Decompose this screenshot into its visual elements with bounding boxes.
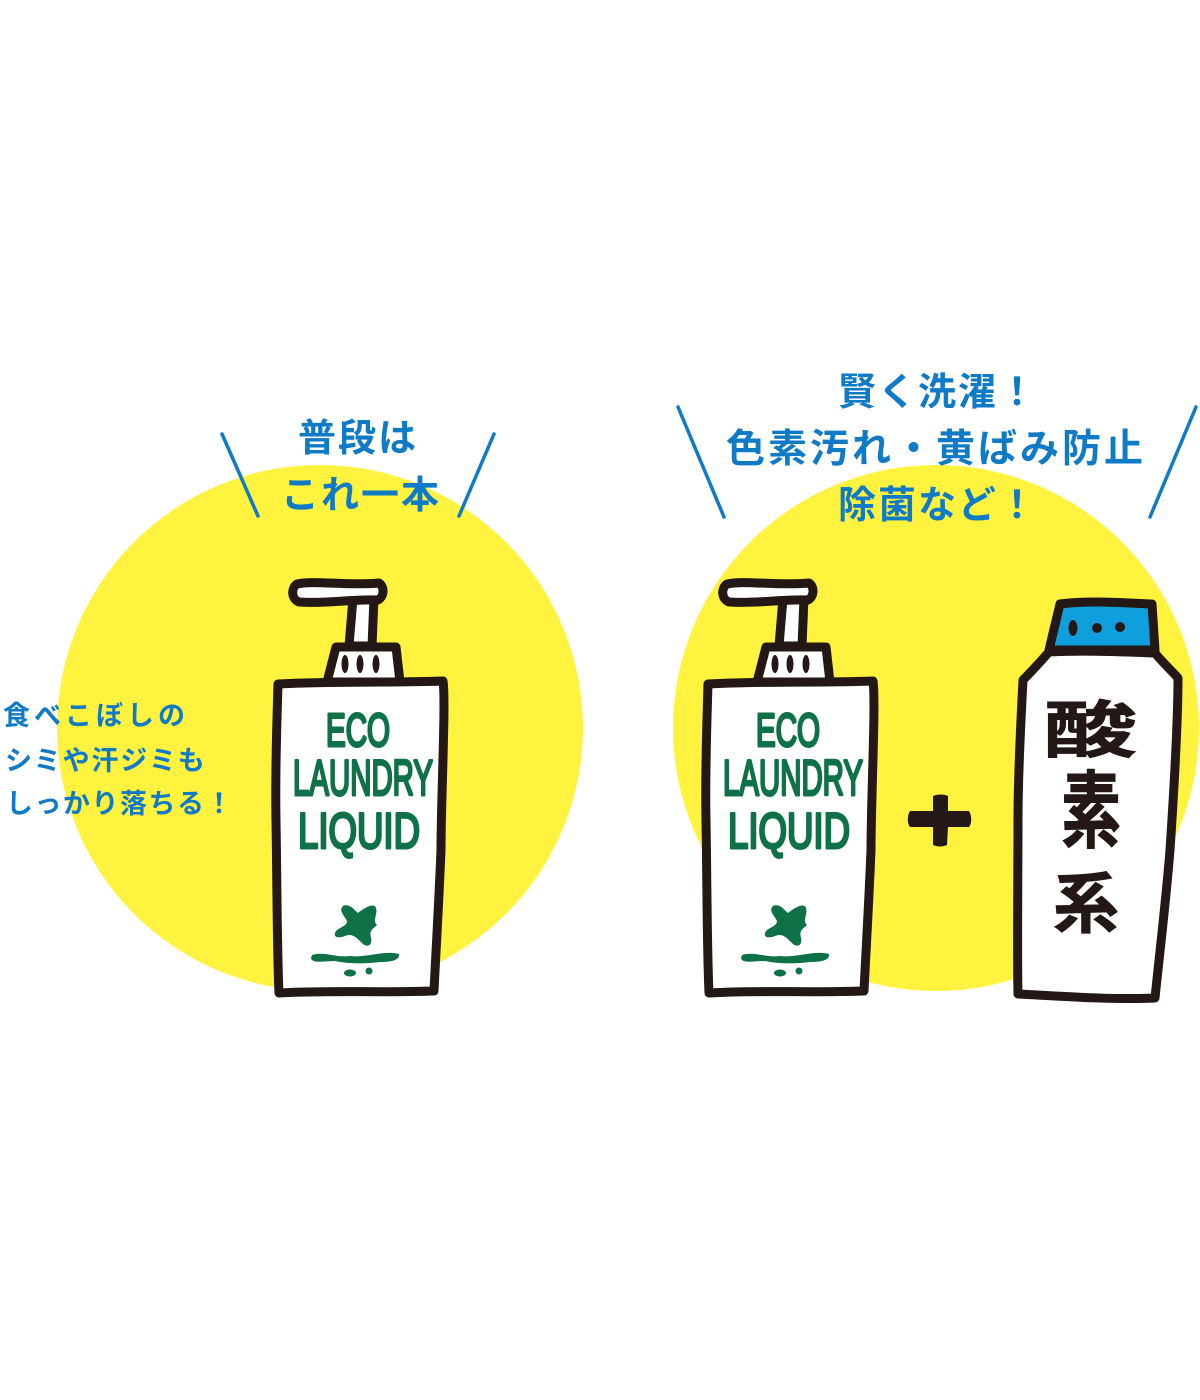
callout ticks left: [222, 434, 494, 516]
note: stains: 食べこぼしの: [3, 701, 189, 731]
heading: smart laundry: 賢く洗濯！: [838, 372, 1038, 414]
note: stains: シミや汗ジミも: [5, 746, 207, 776]
bottle label: sanso-kei: 酸: [1044, 680, 1136, 770]
icon: plus: [908, 794, 971, 846]
bottle logo: [741, 905, 829, 976]
heading: everyday use: 普段は: [298, 418, 418, 460]
bottle logo: [311, 905, 399, 976]
bottle label text: LIQUID: [298, 803, 420, 859]
bottle label text: LIQUID: [728, 803, 850, 859]
icon: oxygen bleach bottle: [1018, 602, 1178, 999]
callout ticks right: [678, 407, 1196, 517]
icon: eco laundry liquid bottle: [706, 583, 874, 993]
bottle label text: LAUNDRY: [723, 750, 863, 806]
bottle label: sanso-kei: 系: [1053, 851, 1119, 947]
panel: smart laundry: [673, 372, 1199, 999]
icon: eco laundry liquid bottle: [276, 583, 444, 993]
panel: everyday use: [3, 418, 583, 993]
yellow circle right: [673, 465, 1199, 991]
bottle label: sanso-kei: [1044, 680, 1136, 947]
heading: smart laundry: 色素汚れ・黄ばみ防止: [726, 428, 1146, 471]
bottle label: sanso-kei: 素: [1061, 744, 1121, 866]
heading: smart laundry: 除菌など！: [838, 485, 1038, 527]
bottle label text: LAUNDRY: [293, 750, 433, 806]
yellow circle left: [57, 465, 583, 991]
bottle label text: ECO: [756, 704, 820, 756]
heading: everyday use: これ一本: [281, 475, 441, 517]
bottle label text: ECO: [326, 704, 390, 756]
note: stains: しっかり落ちる！: [6, 789, 234, 819]
